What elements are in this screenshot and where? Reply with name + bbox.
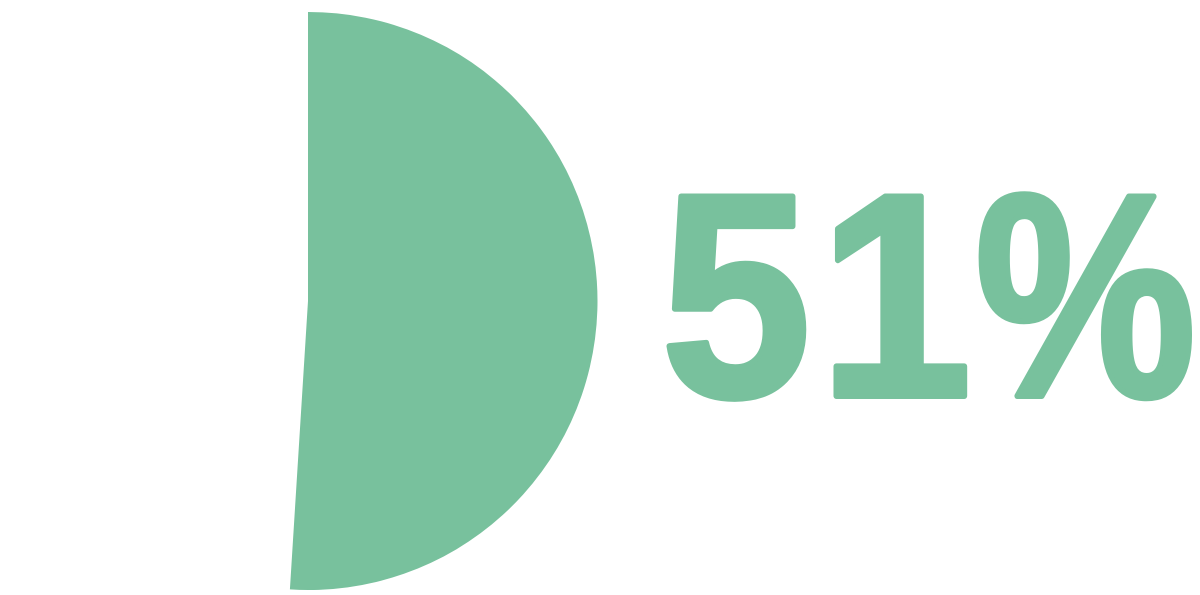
percentage label: 1: [819, 134, 972, 458]
pie slice: 51 percent: [290, 12, 598, 590]
pie chart: [20, 12, 598, 590]
percentage label: [661, 134, 1196, 458]
pie slice: remaining 49 percent: [20, 12, 308, 589]
percentage label: 5: [661, 134, 811, 458]
